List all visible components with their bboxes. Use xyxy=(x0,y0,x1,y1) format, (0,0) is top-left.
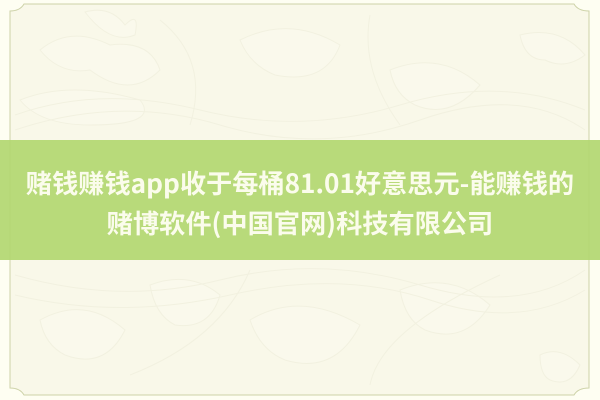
headline text: 赌博软件(中国官网)科技有限公司 xyxy=(107,203,493,241)
headline text xyxy=(26,163,574,241)
headline text: 赌钱赚钱app收于每桶81.01好意思元-能赚钱的 xyxy=(26,163,574,201)
headline band xyxy=(0,140,600,260)
